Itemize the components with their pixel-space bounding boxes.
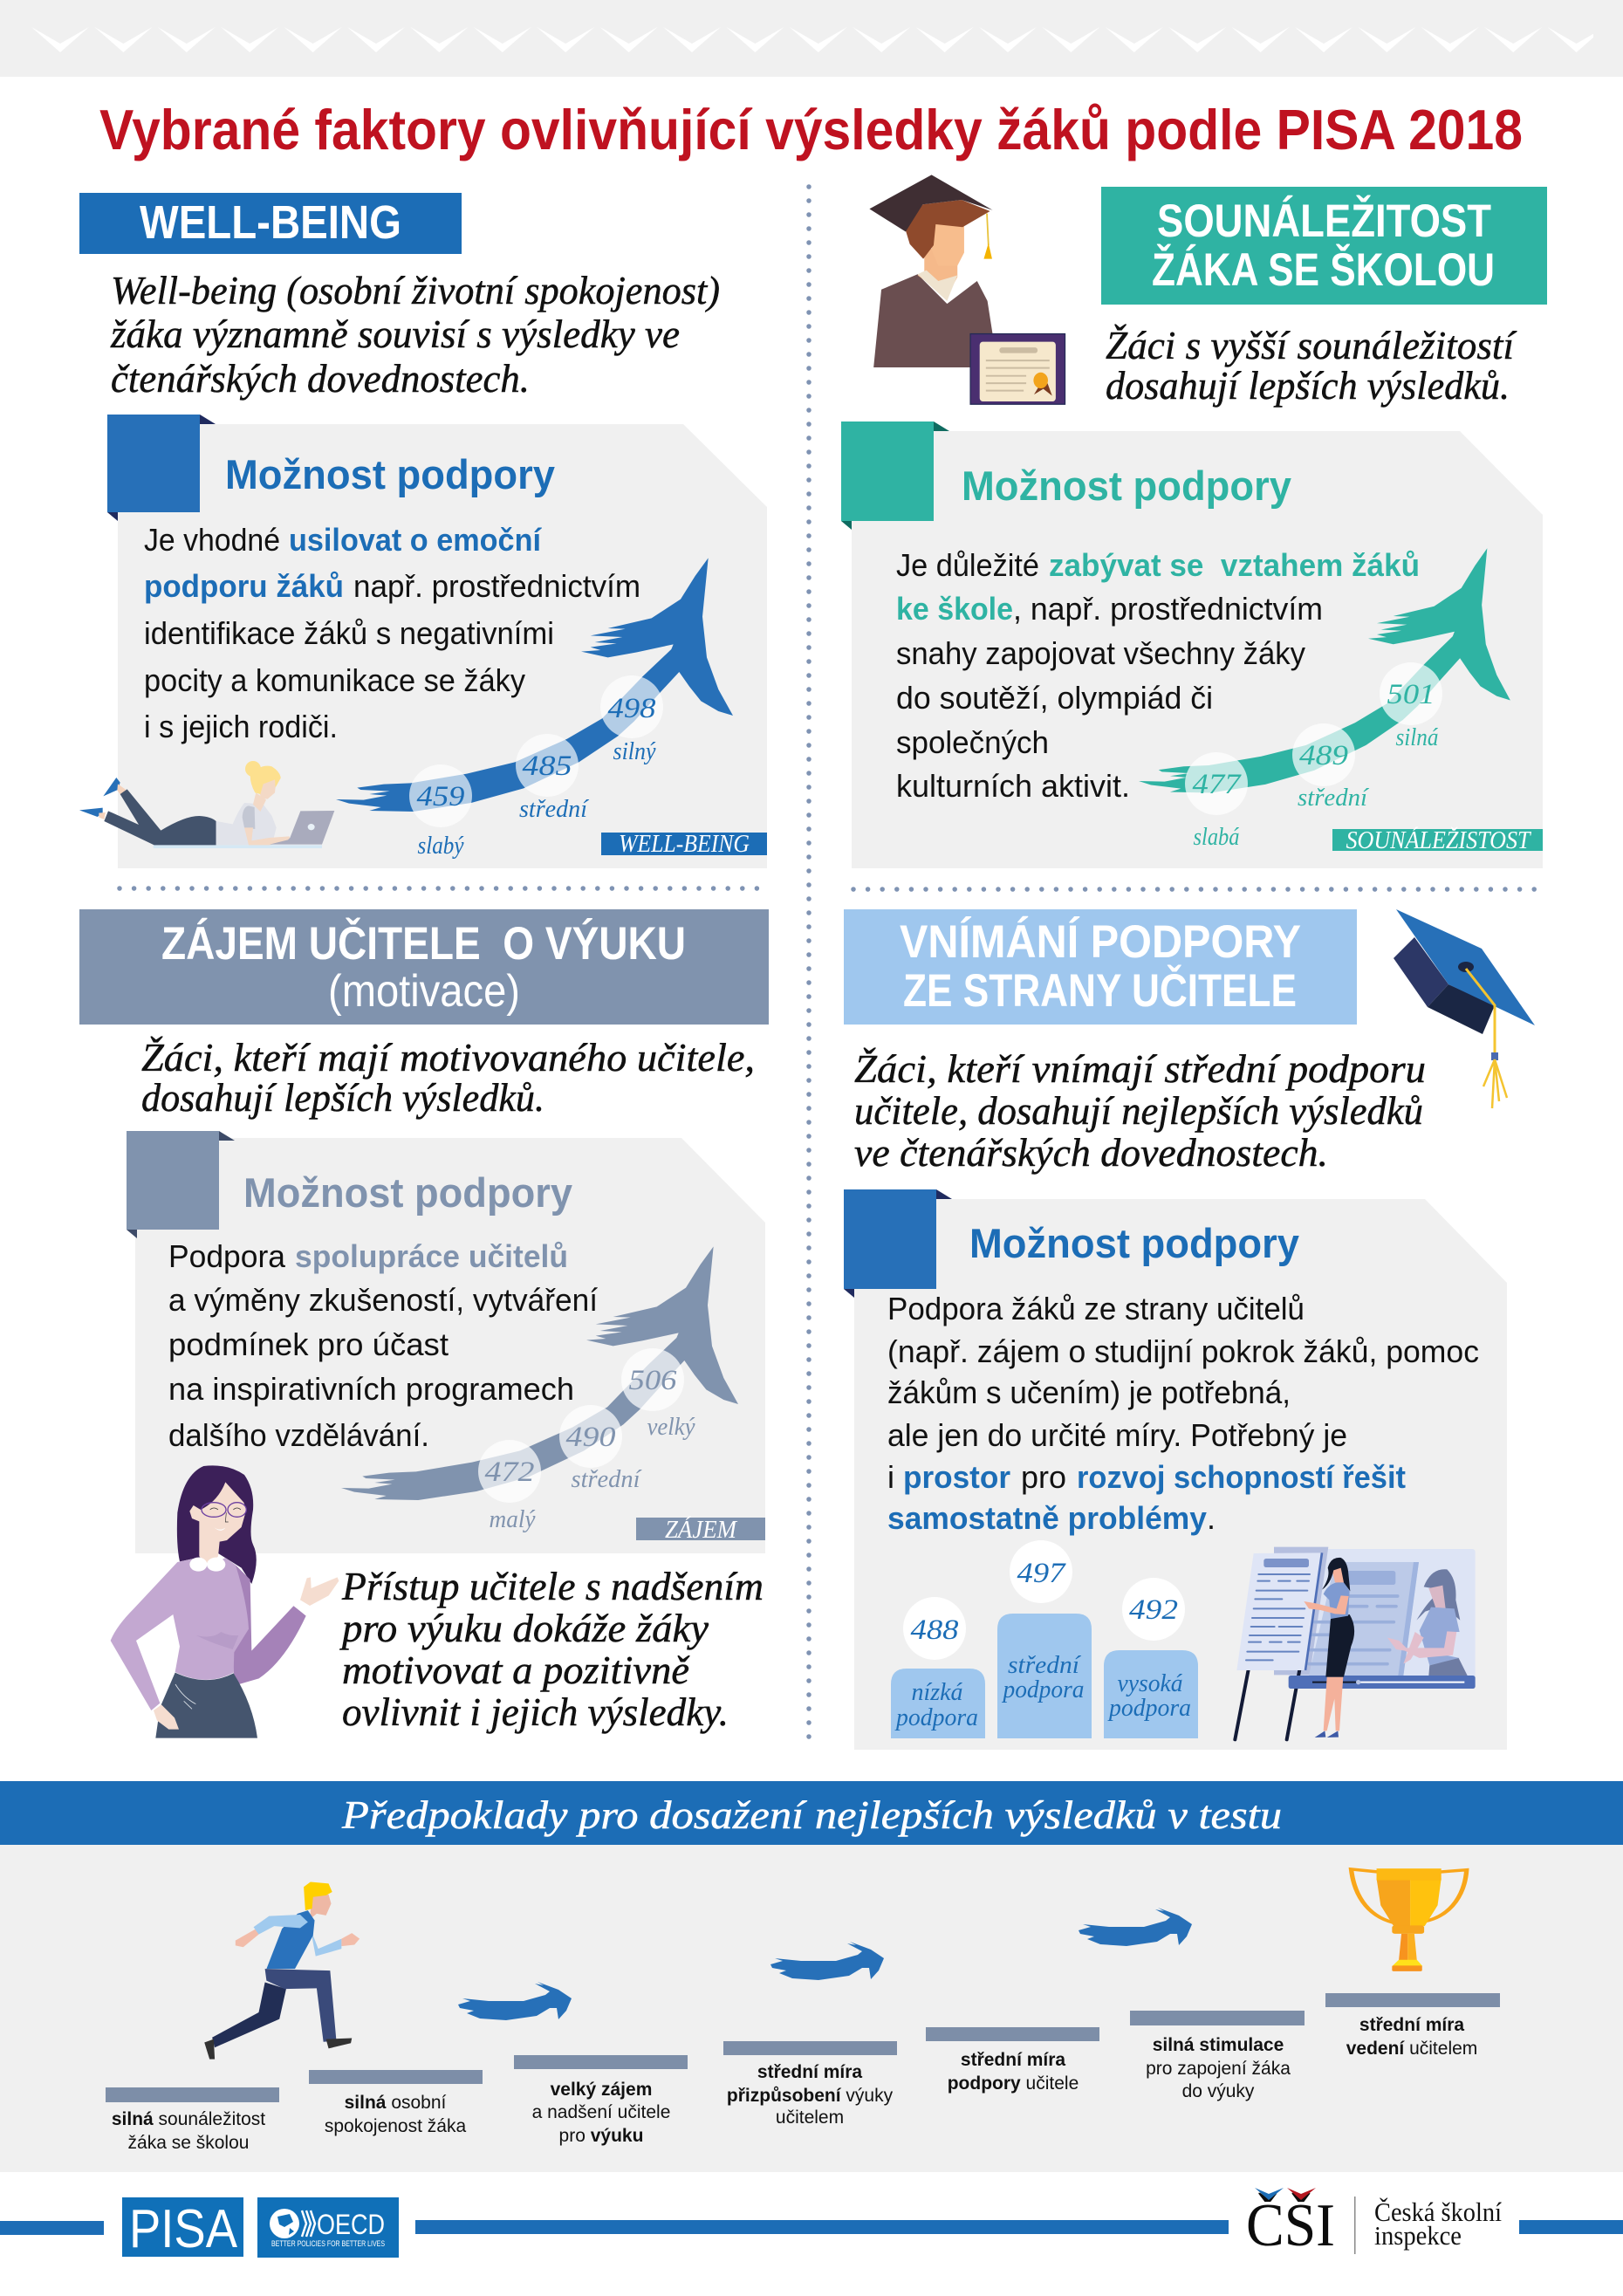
body text: i [887, 1459, 894, 1495]
body text: identifikace žáků s negativními [144, 615, 554, 651]
body text: společných [896, 724, 1049, 760]
heading bar: zájem učitele: (motivace) [328, 966, 520, 1017]
body text: snahy zapojovat všechny žáky [896, 635, 1305, 671]
step 4: střední přizpůsobení: přizpůsobení výuky [727, 2086, 894, 2106]
panel: zájem support [127, 1131, 765, 1553]
body text [887, 1291, 1479, 1536]
body text: na inspirativních programech [168, 1371, 574, 1407]
logo: Česká školní inspekce: ČŠI [1246, 2192, 1335, 2259]
logo: Česká školní inspekce: Česká školní [1374, 2197, 1502, 2227]
bar: střední podpora 497 [997, 1540, 1092, 1738]
body text [896, 547, 1420, 804]
arrow chart: well-being scores: 485 [522, 750, 572, 782]
bar: vysoká podpora 492: 492 [1129, 1594, 1178, 1626]
footer rule centre [415, 2220, 1229, 2234]
banner: prerequisites heading: Předpoklady pro dosažení nejlepších výsledků v testu [341, 1793, 1282, 1837]
arrow chart: well-being scores: 498 [607, 693, 656, 724]
step 2: silná spokojenost [309, 2070, 483, 2136]
icon: teachers presenting [1235, 1547, 1476, 1739]
ribbon corner [107, 415, 216, 521]
logo: OECD: OECD [317, 2209, 385, 2240]
step 2: silná spokojenost: spokojenost žáka [325, 2116, 466, 2136]
footer rule right [1519, 2220, 1623, 2234]
logo: Česká školní inspekce: inspekce [1374, 2220, 1462, 2251]
icon: running student [204, 1881, 360, 2060]
body text: kulturních aktivit. [896, 768, 1130, 804]
body text: Podpora [168, 1238, 286, 1274]
step 3: velký zájem: pro výuku [559, 2126, 643, 2146]
step 1: silná sounáležitost [106, 2087, 279, 2153]
arrow chart: well-being scores: 459 [417, 781, 464, 812]
text block: vnímání intro [854, 1047, 1426, 1175]
dotted column divider [806, 187, 812, 1749]
section: zájem učitele [79, 909, 769, 1738]
body text: samostatně problémy [887, 1500, 1207, 1536]
panel: vnímání support [844, 1189, 1507, 1750]
body text: Je vhodné [144, 522, 280, 558]
step 4: střední přizpůsobení: střední míra [757, 2062, 862, 2082]
text block: teacher enthusiasm: ovlivnit i jejich výsledky. [342, 1690, 729, 1734]
icon: graduate with diploma [869, 175, 1065, 404]
heading bar: vnímání podpory: VNÍMÁNÍ PODPORY [900, 915, 1301, 968]
text block: well-being intro: Well-being (osobní životní spokojenost) [111, 269, 720, 312]
step 5: střední podpora: střední míra [961, 2050, 1065, 2070]
section: vnímání podpory [844, 909, 1535, 1750]
ribbon corner [841, 422, 949, 530]
banner: prerequisites heading [0, 1781, 1623, 1845]
arrow chart: sounáležitost scores [1139, 548, 1510, 851]
arrow chart: well-being scores: střední [519, 795, 590, 823]
body text: rozvoj schopností řešit [1077, 1459, 1406, 1495]
logo: PISA: PISA [129, 2199, 238, 2259]
text block: teacher enthusiasm: pro výuku dokáže žáky [339, 1607, 709, 1650]
heading: možnost podpory: Možnost podpory [225, 451, 555, 497]
bar: vysoká podpora 492 [1104, 1578, 1198, 1738]
arrow chart: zájem scores: malý [489, 1505, 536, 1533]
step 1: silná sounáležitost: silná sounáležitost [112, 2109, 265, 2129]
heading bar: sounáležitost: SOUNÁLEŽITOST [1157, 194, 1491, 247]
body text: prostor [903, 1459, 1010, 1495]
heading bar: zájem učitele [79, 909, 769, 1025]
text block: zájem intro: Žáci, kteří mají motivovaného učitele, [141, 1036, 755, 1079]
arrow chart: zájem scores: 490 [565, 1422, 616, 1453]
bar: nízká podpora 488: 488 [911, 1614, 959, 1646]
bar: vysoká podpora 492: vysoká [1117, 1669, 1183, 1697]
arrow chart: well-being scores: silný [613, 737, 656, 765]
body text: do soutěží, olympiád či [896, 680, 1213, 716]
heading bar: sounáležitost: ŽÁKA SE ŠKOLOU [1152, 243, 1495, 296]
step 7: střední vedení [1325, 1993, 1500, 2059]
step 5: střední podpora: podpory učitele [948, 2073, 1079, 2094]
heading: možnost podpory: Možnost podpory [962, 463, 1291, 509]
tag: well-being: WELL-BEING [619, 830, 750, 858]
text block: zájem intro [141, 1036, 755, 1120]
section: well-being [79, 193, 767, 868]
bar: nízká podpora 488: nízká [911, 1678, 963, 1706]
body text: podmínek pro účast [168, 1326, 449, 1362]
footer rule left [0, 2221, 104, 2235]
step 3: velký zájem [514, 2055, 688, 2146]
body text: dalšího vzdělávání. [168, 1417, 429, 1453]
step 5: střední podpora [926, 2027, 1099, 2094]
body text: (např. zájem o studijní pokrok žáků, pomoc [887, 1333, 1479, 1369]
heading: možnost podpory: Možnost podpory [969, 1220, 1299, 1266]
arrow chart: zájem scores: střední [571, 1465, 642, 1493]
arrow chart: sounáležitost scores: střední [1298, 784, 1370, 812]
dotted row divider left [120, 886, 766, 891]
step 2: silná spokojenost: silná osobní [345, 2093, 447, 2113]
arrow chart: sounáležitost scores: slabá [1194, 823, 1239, 851]
arrow chart: well-being scores: slabý [417, 832, 464, 860]
logo: OECD [257, 2197, 399, 2258]
bar: nízká podpora 488: podpora [894, 1703, 978, 1731]
bar: střední podpora 497: 497 [1017, 1558, 1066, 1589]
body text [168, 1238, 598, 1453]
bar: střední podpora 497: střední [1008, 1651, 1082, 1679]
icon: trophy [1351, 1868, 1467, 1971]
text block: teacher enthusiasm: Přístup učitele s nadšením [341, 1565, 764, 1608]
icon: student with laptop [79, 761, 334, 848]
text block: vnímání intro: ve čtenářských dovednostech. [854, 1131, 1328, 1175]
step 6: silná stimulace: silná stimulace [1153, 2035, 1284, 2055]
arrow 1 [458, 1982, 572, 2020]
body text [144, 522, 640, 744]
heading bar: vnímání podpory: ZE STRANY UČITELE [903, 963, 1297, 1017]
body text: i s jejich rodiči. [144, 709, 338, 744]
top decorative band [0, 0, 1623, 77]
bar: nízká podpora 488 [891, 1597, 985, 1738]
panel: sounáležitost support [841, 422, 1543, 868]
arrow chart: zájem scores: velký [647, 1413, 695, 1441]
body text: . [1207, 1500, 1216, 1536]
arrow chart: sounáležitost scores: 489 [1299, 740, 1348, 771]
bar chart: support levels [891, 1540, 1198, 1738]
text block: teacher enthusiasm: motivovat a pozitivně [342, 1648, 690, 1692]
dotted row divider right [853, 887, 1541, 892]
text block: vnímání intro: Žáci, kteří vnímají střední podporu [854, 1047, 1426, 1091]
body text: a výměny zkušeností, vytváření [168, 1282, 598, 1318]
step 7: střední vedení: střední míra [1359, 2015, 1464, 2035]
body text: pocity a komunikace se žáky [144, 662, 525, 698]
step 1: silná sounáležitost: žáka se školou [128, 2133, 249, 2153]
text block: well-being intro: čtenářských dovednostech. [111, 357, 530, 401]
heading bar: sounáležitost [1101, 187, 1547, 305]
heading bar: vnímání podpory [844, 909, 1357, 1025]
body text: Je důležité [896, 547, 1039, 583]
heading bar: well-being [79, 193, 462, 254]
body text: pro [1021, 1459, 1066, 1495]
step 4: střední přizpůsobení: učitelem [776, 2108, 844, 2128]
arrow 3 [1079, 1908, 1192, 1946]
bar: střední podpora 497: podpora [1002, 1676, 1084, 1703]
text block: well-being intro: žáka významně souvisí s výsledky ve [110, 312, 680, 356]
arrow chart: zájem scores [341, 1246, 738, 1533]
body text: ale jen do určité míry. Potřebný je [887, 1417, 1347, 1453]
step 3: velký zájem: velký zájem [551, 2080, 652, 2100]
heading bar: zájem učitele: ZÁJEM UČITELE O VÝUKU [161, 916, 686, 970]
step 6: silná stimulace: pro zapojení žáka [1146, 2059, 1291, 2079]
ribbon corner [127, 1131, 235, 1238]
logo: OECD: BETTER POLICIES FOR BETTER LIVES [271, 2239, 385, 2249]
step 7: střední vedení: vedení učitelem [1346, 2039, 1477, 2059]
arrow chart: sounáležitost scores: silná [1396, 723, 1438, 751]
arrow chart: sounáležitost scores: 501 [1387, 679, 1435, 710]
body text: , např. prostřednictvím [1013, 591, 1323, 627]
text block: teacher enthusiasm [339, 1565, 764, 1734]
text block: sounáležitost intro: dosahují lepších výsledků. [1106, 364, 1510, 408]
arrow 2 [770, 1942, 884, 1980]
text block: zájem intro: dosahují lepších výsledků. [141, 1076, 544, 1120]
body text: ke škole [896, 591, 1013, 627]
body text: např. prostřednictvím [353, 568, 640, 604]
body text: spolupráce učitelů [295, 1238, 568, 1274]
ribbon corner [844, 1189, 952, 1298]
text block: well-being intro [110, 269, 720, 401]
icon: mortarboard [1394, 909, 1535, 1108]
step 6: silná stimulace: do výuky [1182, 2081, 1255, 2101]
body text: žákům s učením) je potřebná, [887, 1374, 1291, 1410]
tag: zájem [636, 1515, 765, 1544]
text block: sounáležitost intro [1106, 324, 1517, 408]
body text: usilovat o emoční [289, 522, 542, 558]
icon: teacher [111, 1465, 339, 1738]
panel: well-being support [79, 415, 767, 868]
step 6: silná stimulace [1130, 2011, 1305, 2101]
body text: Podpora žáků ze strany učitelů [887, 1291, 1305, 1326]
tag: sounáležitost: SOUNÁLEŽISTOST [1346, 826, 1531, 854]
heading: možnost podpory: Možnost podpory [243, 1169, 572, 1216]
step 4: střední přizpůsobení [723, 2041, 897, 2128]
arrow chart: sounáležitost scores: 477 [1192, 769, 1242, 800]
tag: zájem: ZÁJEM [665, 1515, 738, 1544]
section: staircase of prerequisites [0, 1845, 1623, 2172]
body text: podporu žáků [144, 568, 344, 604]
bar: vysoká podpora 492: podpora [1107, 1694, 1191, 1722]
body text: zabývat se vztahem žáků [1049, 547, 1420, 583]
heading bar: well-being: WELL-BEING [140, 196, 401, 249]
arrow chart: well-being scores [336, 558, 733, 860]
section: sounáležitost [841, 175, 1547, 868]
arrow chart: zájem scores: 506 [628, 1365, 677, 1396]
text block: vnímání intro: učitele, dosahují nejlepších výsledků [854, 1089, 1423, 1133]
step 3: velký zájem: a nadšení učitele [532, 2102, 670, 2122]
text block: sounáležitost intro: Žáci s vyšší sounáležitostí [1106, 324, 1517, 367]
logo: Česká školní inspekce [1246, 2188, 1502, 2259]
arrow chart: zájem scores: 472 [485, 1456, 534, 1488]
